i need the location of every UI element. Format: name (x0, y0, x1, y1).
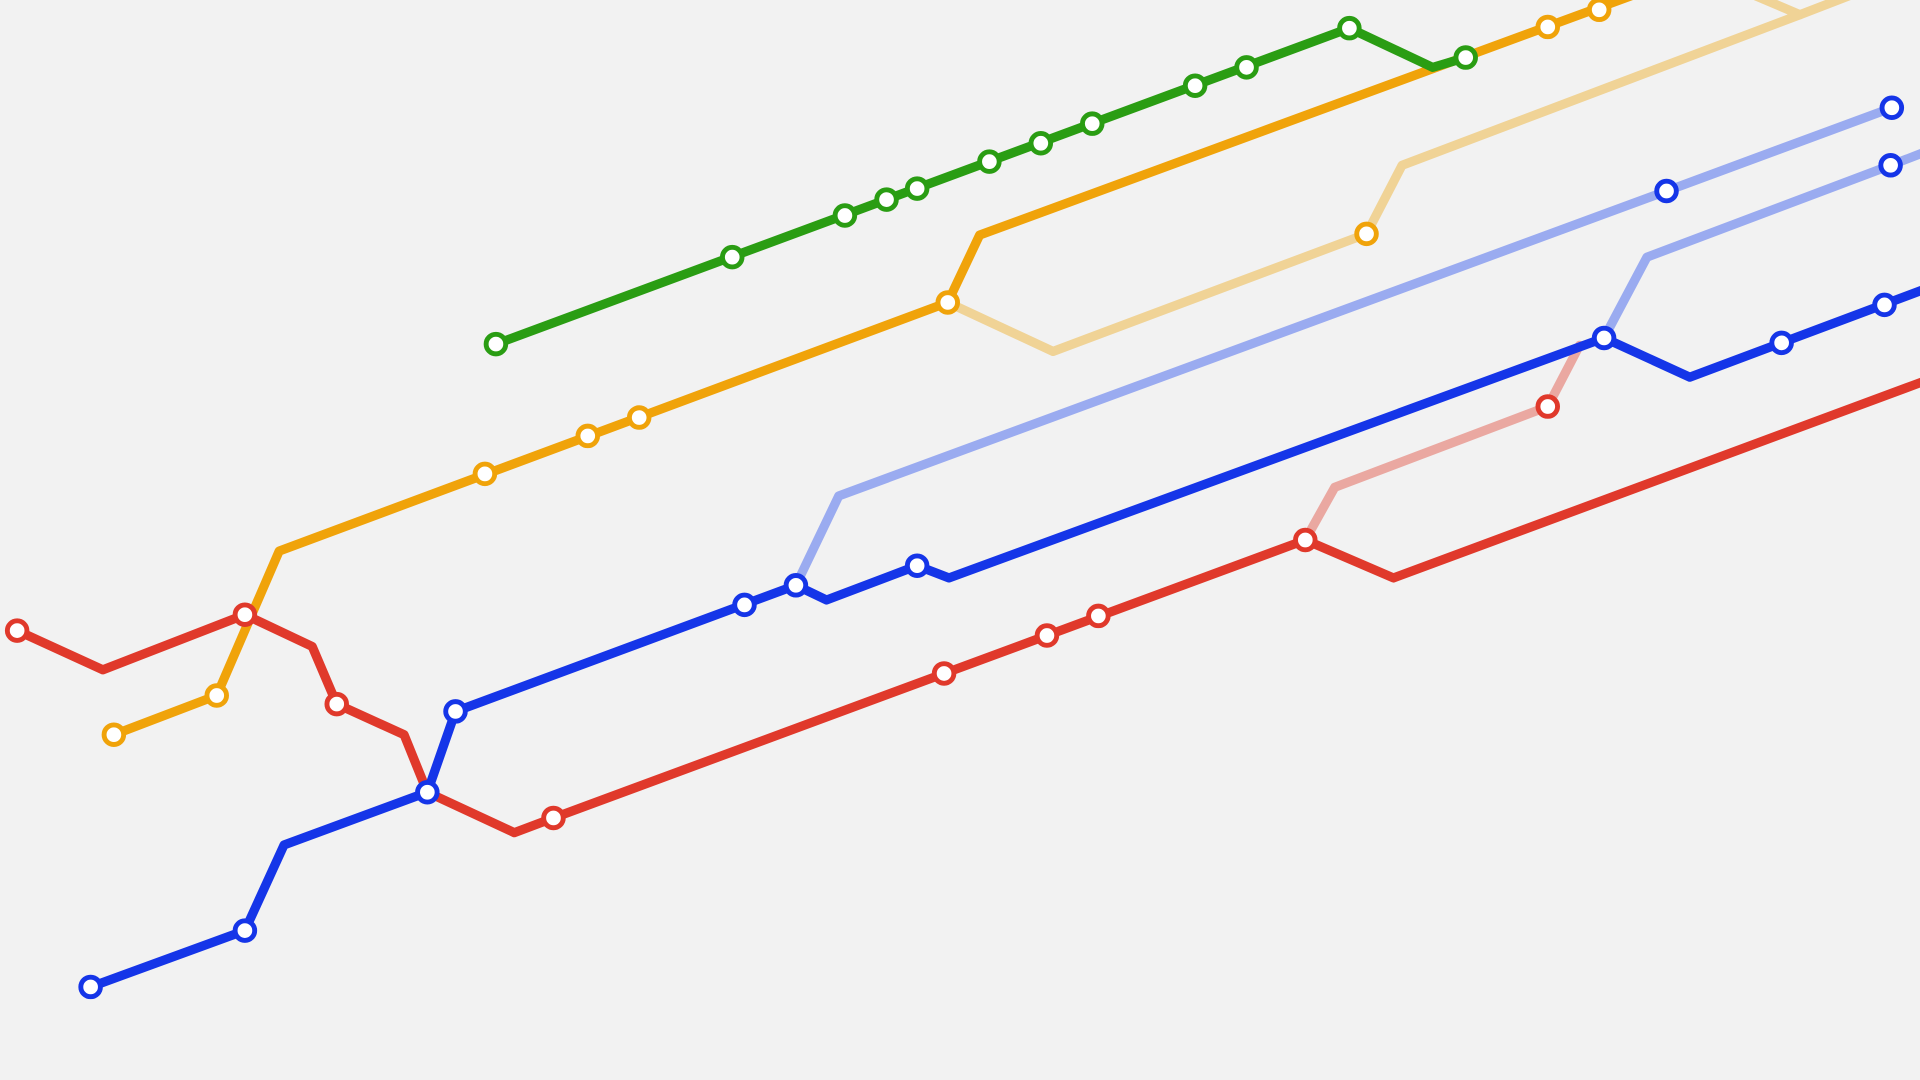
green line (486, 18, 1476, 354)
red line (7, 380, 1920, 833)
light red branch line (1305, 345, 1580, 540)
orange line (104, 0, 1653, 744)
blue line (81, 288, 1920, 997)
light blue branch lines (796, 98, 1920, 585)
light orange branch line (948, 0, 1886, 351)
